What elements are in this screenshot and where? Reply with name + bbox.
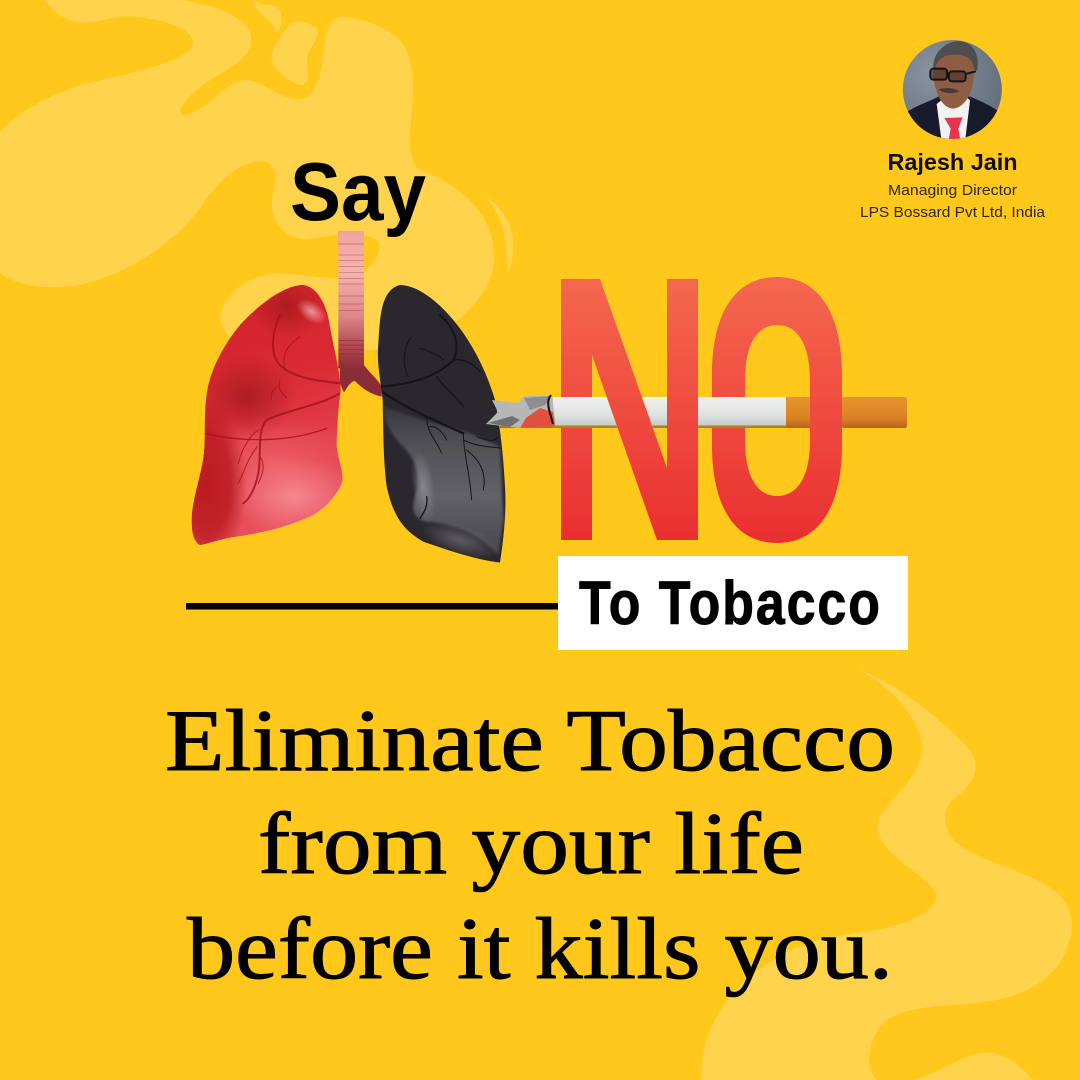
name: Rajesh Jain	[888, 149, 1018, 175]
tagline	[165, 693, 895, 998]
tagline line 1: Eliminate Tobacco	[165, 693, 895, 790]
tagline line 2: from your life	[258, 796, 804, 893]
presenter name and role	[860, 149, 1046, 221]
job title: Managing Director	[888, 182, 1017, 199]
cigarette: visible segments between the letters	[500, 397, 907, 428]
illustration: lungs	[167, 232, 510, 570]
portrait: Rajesh Jain	[902, 40, 1002, 139]
letter O	[712, 277, 842, 543]
windpipe	[338, 232, 382, 397]
healthy red lung	[192, 285, 342, 545]
divider line	[186, 603, 558, 610]
label: To Tobacco	[558, 556, 908, 650]
smoke shape: bottom right	[702, 668, 1072, 1080]
tagline line 3: before it kills you.	[187, 901, 893, 998]
diseased black lung	[373, 280, 510, 567]
letter N	[561, 279, 698, 540]
word NO with cigarette	[486, 277, 907, 543]
smoke shape: top left	[0, 0, 513, 350]
heading: Say: Say	[290, 145, 426, 238]
company: LPS Bossard Pvt Ltd, India	[860, 204, 1046, 221]
label text: To Tobacco	[579, 569, 880, 637]
cigarette ash	[486, 395, 556, 428]
